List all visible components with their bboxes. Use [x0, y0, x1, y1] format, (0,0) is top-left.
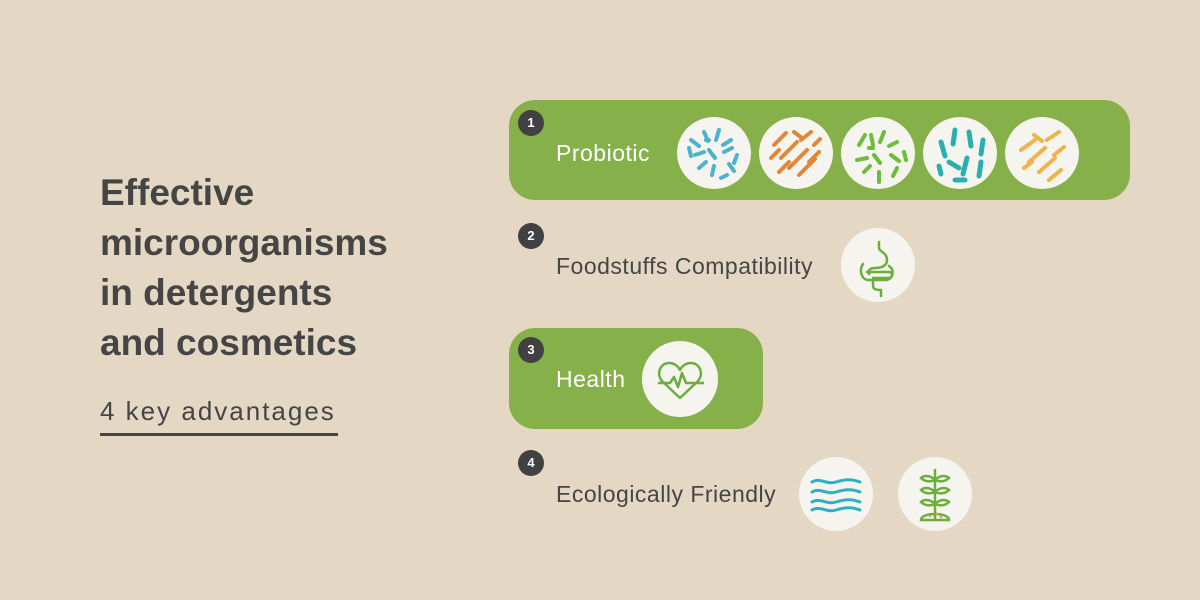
icon: plant	[898, 457, 972, 531]
icons: bacteria	[677, 117, 1079, 189]
badge 4	[518, 450, 544, 476]
panel: ecological	[518, 450, 972, 531]
title: and cosmetics	[100, 322, 357, 363]
panel: health	[509, 328, 763, 429]
subtitle: 4 key advantages	[100, 396, 336, 426]
panel: foodstuffs	[518, 223, 915, 302]
label probiotic: Probiotic	[556, 140, 650, 166]
badge 3	[518, 337, 544, 363]
panel: probiotic	[509, 100, 1130, 200]
title: microorganisms	[100, 222, 388, 263]
badge 3: 3	[527, 342, 535, 357]
icon: heart	[642, 341, 718, 417]
badge 1	[518, 110, 544, 136]
badge 2	[518, 223, 544, 249]
badge 4: 4	[527, 455, 535, 470]
label ecological: Ecologically Friendly	[556, 481, 776, 507]
title: Effective	[100, 172, 254, 213]
label health: Health	[556, 366, 625, 392]
label foodstuffs: Foodstuffs Compatibility	[556, 253, 813, 279]
title	[100, 172, 388, 363]
badge 2: 2	[527, 228, 535, 243]
title: in detergents	[100, 272, 332, 313]
icon: water waves	[799, 457, 873, 531]
icon: stomach	[841, 228, 915, 302]
badge 1: 1	[527, 115, 535, 130]
